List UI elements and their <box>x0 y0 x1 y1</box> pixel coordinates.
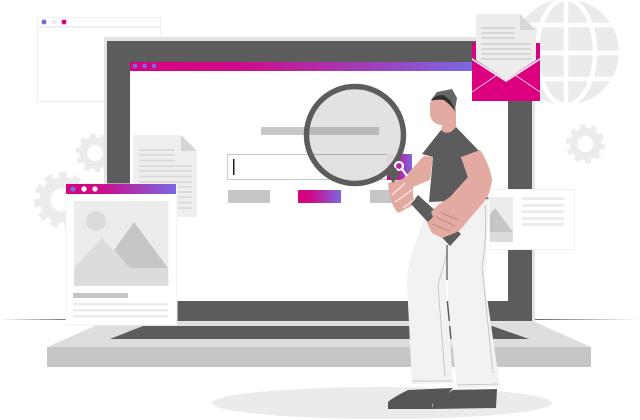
neck and head <box>430 97 456 133</box>
image window <box>66 184 177 325</box>
title bar dots <box>133 64 156 68</box>
floor shadow <box>212 387 552 419</box>
gradient button <box>298 190 341 203</box>
magnifier lens <box>307 87 403 183</box>
search box edge through lens <box>311 154 387 155</box>
heading bar through lens <box>307 127 379 135</box>
magnifier ring <box>306 86 404 184</box>
shirt <box>422 127 489 202</box>
caption lines <box>73 293 168 318</box>
background browser window <box>38 18 160 102</box>
grey button right <box>370 190 412 203</box>
gear large left <box>37 175 87 225</box>
hair shadow <box>431 95 456 112</box>
laptop screen <box>130 62 508 301</box>
trouser crease <box>446 245 448 280</box>
window dots <box>70 186 98 192</box>
search box <box>228 154 412 180</box>
right finger lines <box>432 213 458 231</box>
globe <box>510 0 624 106</box>
laptop <box>47 37 591 367</box>
horizon line right <box>535 319 640 320</box>
search button <box>387 154 412 180</box>
horizon line left <box>0 319 66 320</box>
shoes <box>388 388 497 409</box>
screen title bar <box>130 62 472 71</box>
envelope <box>472 14 540 101</box>
magnifier <box>306 86 407 184</box>
grey button left <box>228 190 270 203</box>
trouser folds <box>412 205 499 385</box>
laptop base front <box>47 347 591 367</box>
laptop keyboard <box>110 326 529 339</box>
hair <box>431 89 457 110</box>
gear right <box>568 127 602 161</box>
left finger lines <box>392 183 415 208</box>
window title bar <box>66 184 176 194</box>
laptop base top <box>47 322 591 347</box>
laptop lid edge <box>104 37 535 322</box>
magnifier neck <box>387 167 400 183</box>
heading placeholder bar <box>261 127 379 135</box>
left arm and hand <box>388 156 433 213</box>
image placeholder <box>74 201 168 286</box>
magnifying icon on button <box>395 162 407 176</box>
trousers <box>407 198 500 389</box>
person <box>306 86 500 409</box>
document behind window <box>133 135 197 217</box>
right card <box>490 190 574 250</box>
gear small left <box>78 136 112 170</box>
right arm and hand <box>427 150 492 238</box>
handle <box>411 195 461 246</box>
laptop screen bezel <box>107 41 532 321</box>
